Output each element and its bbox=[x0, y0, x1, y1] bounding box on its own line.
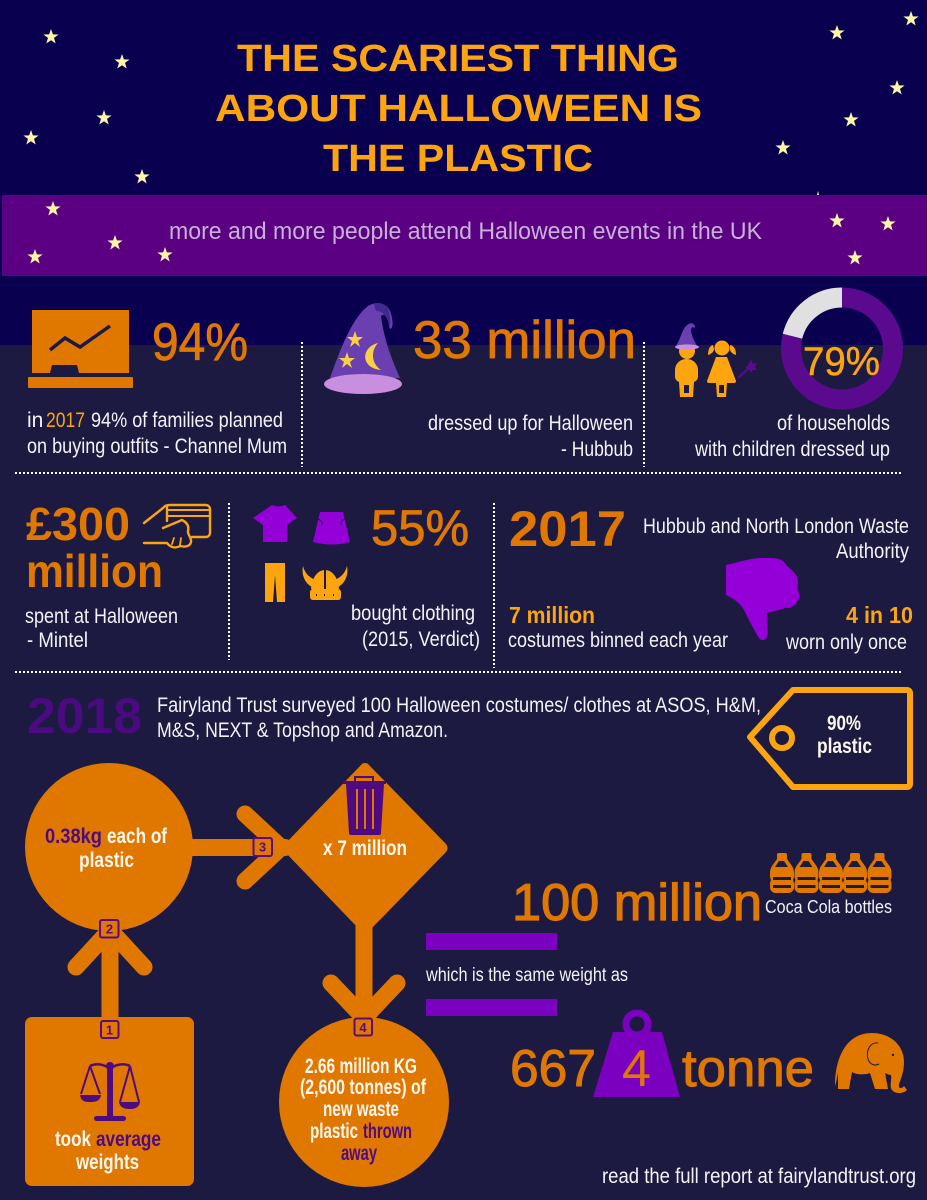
icon: wizard hat bbox=[324, 303, 402, 394]
step 3: diamond: x 7 million bbox=[323, 837, 407, 860]
icon: hand with card bbox=[144, 505, 210, 547]
icon: scales bbox=[80, 1062, 140, 1121]
icon: price tag 90% plastic: 90% bbox=[827, 712, 861, 735]
step 2: circle: 0.38kg bbox=[45, 825, 102, 848]
icon: viking helmet bbox=[303, 566, 347, 600]
stat: 2017: 2017 bbox=[509, 501, 626, 557]
stat: 55%: 55% bbox=[371, 500, 469, 556]
text: 4 in 10 worn only once: 4 in 10 bbox=[846, 602, 913, 628]
icon: laptop with chart bbox=[28, 310, 133, 388]
text: families planned outfits: 94% of families planned bbox=[91, 409, 283, 432]
badge: 3 bbox=[254, 838, 272, 856]
title: THE SCARIEST THING bbox=[237, 38, 679, 80]
text: Hubbub and North London Waste Authority: Authority bbox=[836, 540, 909, 563]
text: bought clothing: (2015, Verdict) bbox=[362, 628, 480, 651]
badge: 3: 3 bbox=[259, 840, 266, 854]
chart: 79% donut: 79% bbox=[803, 340, 880, 384]
text: households: with children dressed up bbox=[694, 438, 890, 461]
step 1: box: took bbox=[55, 1128, 91, 1151]
stat: 100 million: 100 million bbox=[512, 874, 762, 932]
banner: purple band bbox=[2, 195, 927, 276]
badge: 2: 2 bbox=[106, 922, 113, 936]
subtitle: more and more people attend Halloween events in the UK bbox=[169, 218, 762, 245]
title: ABOUT HALLOWEEN IS bbox=[215, 88, 702, 130]
step 2: circle: plastic bbox=[79, 849, 134, 872]
icon: weight with 4: 4 bbox=[622, 1040, 651, 1098]
text: dressed up bbox=[428, 412, 633, 461]
step 4: circle: plastic bbox=[310, 1120, 358, 1143]
badge: 4: 4 bbox=[359, 1020, 367, 1035]
background: lower panel bbox=[0, 345, 927, 1200]
step 4: circle: thrown bbox=[363, 1120, 412, 1143]
icon: trousers bbox=[265, 563, 285, 602]
title: THE PLASTIC bbox=[323, 138, 593, 180]
title bbox=[215, 38, 702, 180]
text: dressed up: dressed up for Halloween bbox=[428, 412, 633, 435]
text: same weight: which is the same weight as bbox=[425, 965, 628, 986]
text: Hubbub and North London Waste Authority bbox=[643, 515, 909, 563]
stat: £300 million bbox=[26, 498, 163, 597]
stat: 667: 667 bbox=[510, 1040, 596, 1098]
text: bought clothing bbox=[351, 602, 480, 651]
step 4: circle: (2,600 tonnes) of bbox=[300, 1076, 427, 1099]
text: spent at Halloween: - Mintel bbox=[27, 629, 88, 652]
stars bbox=[23, 11, 919, 264]
heading: 2018: 2018 bbox=[27, 688, 142, 744]
text: Fairyland Trust survey: M&S, NEXT & Topshop and Amazon. bbox=[157, 719, 448, 742]
step 1: box bbox=[25, 1017, 194, 1186]
chart: 79% donut bbox=[791, 297, 893, 400]
badge: 4 bbox=[354, 1018, 372, 1036]
text: spent at Halloween: spent at Halloween bbox=[25, 605, 178, 628]
text: Fairyland Trust survey bbox=[157, 694, 761, 742]
text: families planned outfits bbox=[27, 409, 287, 458]
step 1: box: average bbox=[96, 1128, 161, 1151]
stat: 33 million: 33 million bbox=[413, 311, 636, 370]
text: 7 million costumes binned: costumes binned each year bbox=[508, 629, 728, 652]
text: households: of households bbox=[777, 412, 890, 435]
text: 4 in 10 worn only once bbox=[785, 602, 913, 654]
step 2: circle bbox=[25, 763, 193, 931]
step 2: circle: each of bbox=[107, 825, 168, 848]
background: night sky bbox=[0, 0, 927, 345]
stat: £300 million: million bbox=[26, 545, 163, 597]
icon: elephant bbox=[835, 1033, 907, 1093]
badge: 1: 1 bbox=[106, 1022, 113, 1038]
text: Fairyland Trust survey: Fairyland Trust surveyed 100 Halloween costumes/ clothes at ASOS, H&M, bbox=[157, 694, 761, 717]
icon: thumbs down bbox=[726, 558, 799, 640]
text: Coca Cola bottles: Coca Cola bottles bbox=[765, 897, 892, 917]
icon: bottles bbox=[770, 853, 892, 893]
text: dressed up: - Hubbub bbox=[561, 438, 633, 461]
step 3: diamond bbox=[283, 763, 448, 933]
divider bar: top bbox=[426, 933, 557, 950]
text: 4 in 10 worn only once: worn only once bbox=[785, 631, 907, 654]
icon: t-shirt bbox=[253, 505, 297, 542]
text: 7 million costumes binned: 7 million bbox=[509, 602, 595, 628]
text: spent at Halloween bbox=[25, 605, 178, 652]
flow arrow: 3 to 4 bbox=[331, 920, 397, 1025]
text: families planned outfits: 2017 bbox=[46, 409, 85, 432]
icon: trash can bbox=[343, 777, 386, 835]
stat: £300 million: £300 bbox=[26, 498, 130, 550]
badge: 1 bbox=[101, 1021, 118, 1038]
divider bar: bottom bbox=[426, 999, 557, 1016]
step 4: circle bbox=[279, 1017, 449, 1187]
icon: price tag 90% plastic bbox=[750, 690, 910, 787]
step 4: circle: 2.66 million KG bbox=[305, 1055, 417, 1078]
text: families planned outfits: on buying outfits - Channel Mum bbox=[27, 435, 287, 458]
stat: 94%: 94% bbox=[152, 313, 248, 372]
flow arrow: 1 to 2 bbox=[76, 930, 144, 1025]
stat: tonne: tonne bbox=[682, 1040, 814, 1098]
icon: weight with 4 bbox=[593, 1013, 680, 1098]
step 4: circle: new waste bbox=[323, 1098, 399, 1121]
flow arrow: 2 to 3 bbox=[185, 814, 285, 881]
text: families planned outfits: in bbox=[27, 409, 43, 432]
step 1: box: weights bbox=[75, 1151, 139, 1174]
step 4: circle: away bbox=[341, 1142, 377, 1165]
icon: children in costume bbox=[675, 323, 757, 397]
icon: price tag 90% plastic: plastic bbox=[817, 735, 872, 758]
badge: 2 bbox=[100, 920, 118, 938]
text: 7 million costumes binned bbox=[508, 602, 728, 652]
icon: skirt bbox=[313, 512, 350, 544]
text: households bbox=[694, 412, 890, 461]
text: bought clothing: bought clothing bbox=[351, 602, 475, 625]
